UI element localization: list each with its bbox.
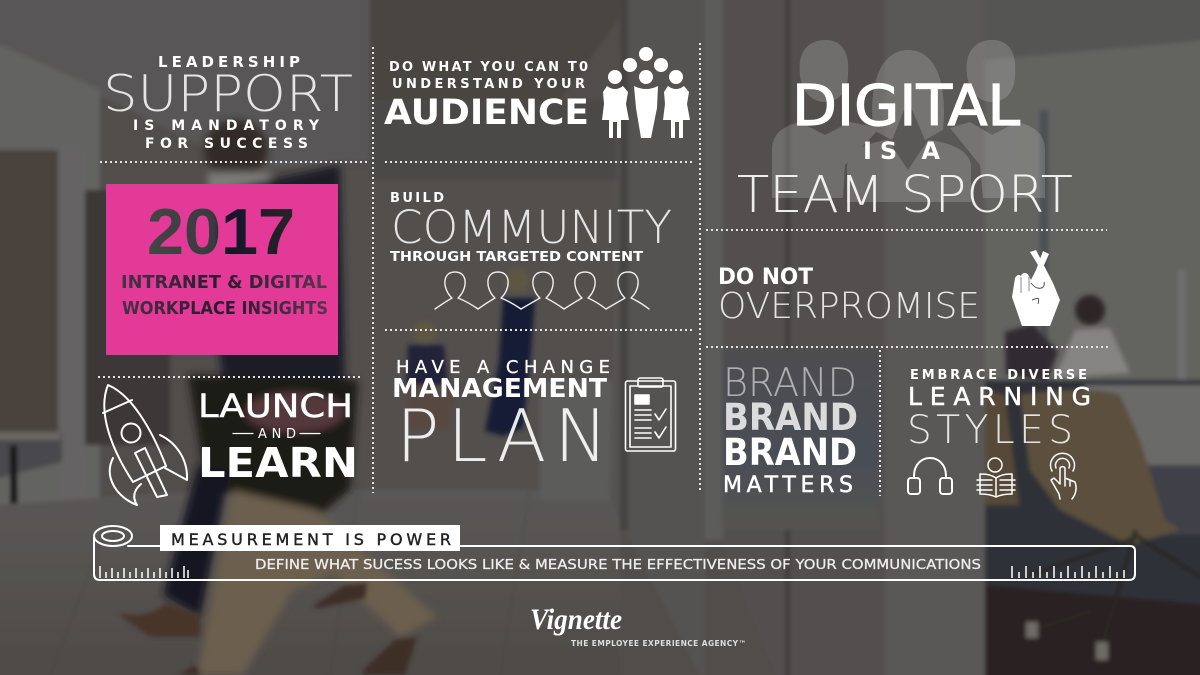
icon: people outlines [435, 272, 649, 309]
icon: rocket [103, 385, 187, 505]
panel: 2017 pink card: WORKPLACE INSIGHTS [122, 298, 328, 319]
panel: digital is a team sport [737, 40, 1073, 225]
panel: 2017 pink card: 2017 [147, 195, 295, 268]
panel: 2017 pink card: INTRANET & DIGITAL [121, 272, 327, 293]
panel: digital is a team sport: TEAM SPORT [737, 166, 1073, 225]
panel: understand your audience: AUDIENCE [384, 93, 589, 133]
panel: change management plan: HAVE A CHANGE [396, 357, 610, 378]
panel: understand your audience: DO WHAT YOU CAN T0 [389, 60, 588, 75]
tape ticks right [1012, 566, 1124, 578]
icon: clipboard checklist [626, 378, 676, 451]
panel: change management plan: MANAGEMENT [392, 374, 607, 404]
panel: build community: THROUGH TARGETED CONTENT [390, 250, 643, 265]
panel: brand matters: BRAND [723, 396, 858, 439]
icon: headphones [908, 458, 952, 494]
panel: brand matters [723, 361, 858, 498]
panel: digital is a team sport: IS A [863, 137, 940, 165]
panel: diverse learning styles: LEARNING [908, 382, 1091, 411]
panel: measurement tape: DEFINE WHAT SUCESS LOOKS LIKE & MEASURE THE EFFECTIVENESS OF YOUR COMMUNICATIONS [255, 558, 981, 573]
panel: diverse learning styles: STYLES [907, 408, 1073, 453]
panel: brand matters: BRAND [723, 431, 857, 474]
logo: Vignette: Vignette [530, 603, 622, 636]
photo: walking person [163, 120, 437, 675]
dotted dividers [98, 43, 1110, 496]
panel: leadership support: LEADERSHIP [158, 53, 300, 71]
logo: Vignette [530, 603, 746, 648]
icon: crossed fingers [1012, 250, 1060, 326]
panel: build community [390, 191, 672, 309]
tape outline [94, 526, 1135, 580]
heading tab [160, 525, 460, 551]
panel: 2017 pink card [106, 184, 338, 355]
panel: measurement tape [94, 525, 1135, 580]
logo: Vignette: THE EMPLOYEE EXPERIENCE AGENCY™ [571, 639, 746, 648]
panel: diverse learning styles [907, 368, 1091, 499]
panel: diverse learning styles: EMBRACE DIVERSE [910, 368, 1087, 383]
icon: touch hand [1050, 453, 1076, 499]
tape ticks left [100, 566, 188, 578]
panel: digital is a team sport: DIGITAL [792, 74, 1020, 139]
panel: brand matters: MATTERS [723, 473, 853, 498]
photo: seated and standing women [406, 268, 535, 436]
panel: do not overpromise [718, 250, 1060, 327]
panel: launch and learn [103, 385, 358, 505]
panel: understand your audience [384, 47, 690, 138]
photo: meeting participants [1005, 295, 1130, 382]
panel: leadership support: FOR SUCCESS [145, 136, 308, 152]
icon: team silhouettes [772, 40, 1045, 202]
icon: audience group [602, 47, 690, 138]
panel: leadership support: IS MANDATORY [133, 118, 320, 134]
panel: leadership support [103, 53, 353, 152]
panel: measurement tape: MEASUREMENT IS POWER [171, 530, 451, 549]
panel: launch and learn: AND [258, 427, 296, 442]
panel: do not overpromise: OVERPROMISE [718, 286, 980, 327]
panel: leadership support: SUPPORT [103, 65, 353, 123]
panel: understand your audience: UNDERSTAND YOUR [392, 77, 585, 92]
panel: do not overpromise: DO NOT [718, 265, 813, 290]
panel: build community: BUILD [390, 191, 444, 206]
panel: build community: COMMUNITY [391, 201, 672, 254]
panel: launch and learn: LAUNCH [198, 387, 353, 425]
panel: launch and learn: LEARN [198, 439, 358, 487]
panel: brand matters: BRAND [723, 361, 857, 406]
panel: change management plan [392, 357, 676, 478]
panel: change management plan: PLAN [396, 394, 608, 478]
icon: reader with book [977, 458, 1015, 497]
